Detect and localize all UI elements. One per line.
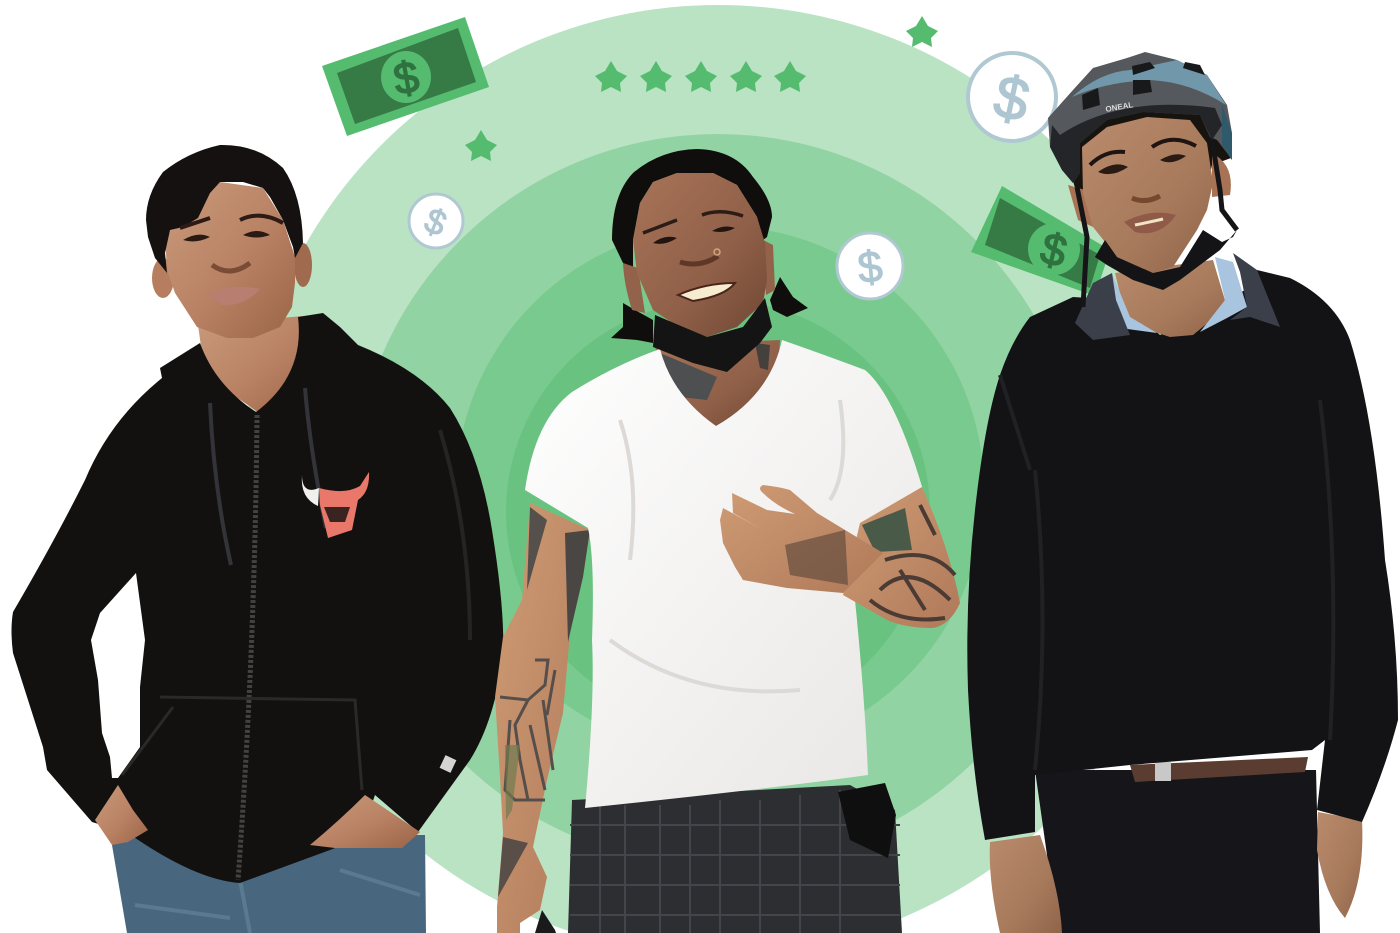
coin top right: [968, 53, 1056, 141]
t-shirt: [525, 340, 923, 808]
left hand: [990, 835, 1062, 933]
nose: [680, 256, 718, 264]
person: left man in black hoodie: [12, 145, 503, 933]
face mask under chin: [1095, 230, 1237, 290]
helmet blue side: [1222, 105, 1232, 160]
drawstrings: [210, 388, 326, 565]
arm tattoos: [498, 507, 590, 897]
coin left: $: [419, 201, 452, 244]
sweater: [967, 270, 1398, 840]
star left: [465, 130, 497, 161]
brows: [643, 212, 743, 233]
phone in hand: [535, 910, 556, 933]
coin centre right: $: [855, 242, 885, 293]
helmet lining and hair: [1058, 100, 1231, 195]
banknote top left: $: [390, 52, 423, 105]
ear right: [294, 243, 312, 287]
left hand: [95, 785, 148, 845]
shirt folds: [610, 400, 843, 691]
hair: [612, 149, 772, 267]
collar blue lining: [1105, 257, 1247, 333]
sleeve tag: [440, 755, 456, 773]
coin top right: $: [988, 62, 1035, 135]
pocket pouch: [838, 783, 896, 858]
brows: [1090, 140, 1196, 165]
lips: [207, 287, 260, 305]
banknote right: $: [1036, 224, 1071, 277]
row of five stars: [595, 61, 806, 92]
ears: [623, 240, 775, 313]
concentric green circles: [243, 5, 1193, 933]
helmet shell: [1048, 52, 1232, 183]
left arm: [495, 503, 590, 933]
ear left: [152, 258, 174, 298]
face: [165, 182, 295, 338]
trouser plaid: [570, 790, 900, 933]
trousers: [1035, 770, 1320, 933]
right forearm: [843, 487, 960, 628]
face: [1082, 117, 1213, 273]
chin strap: [1077, 140, 1237, 307]
jeans: [112, 835, 426, 933]
coin left: [409, 194, 463, 248]
neck: [655, 340, 780, 426]
face: [633, 173, 767, 337]
coin centre right: [837, 233, 903, 299]
bull logo: [302, 472, 369, 538]
star top right: [906, 16, 938, 47]
brows: [180, 216, 283, 228]
sleeve fold: [440, 430, 470, 640]
banknote right: [971, 186, 1110, 296]
hoodie pocket: [122, 697, 362, 790]
hoodie zipper: [238, 415, 257, 880]
helmet: [1048, 52, 1232, 183]
nose: [212, 263, 250, 271]
neck tattoo small: [755, 343, 770, 370]
eyes: [653, 227, 735, 244]
right hand: [310, 795, 420, 848]
hoodie: [12, 313, 503, 883]
neck tattoo: [660, 353, 717, 400]
helmet blue band: [1072, 60, 1226, 105]
ears: [1068, 153, 1231, 227]
teeth: [1135, 219, 1163, 225]
white gap between arm and torso: [91, 573, 145, 778]
face mask: [653, 298, 772, 372]
trousers: [568, 785, 902, 933]
smile: [678, 283, 735, 301]
right hand: [1317, 812, 1362, 918]
helmet brand label: ONEAL: [1105, 100, 1134, 114]
hand tattoo: [785, 530, 848, 585]
person: right man in black sweater with helmet: [967, 52, 1398, 933]
hair: [146, 145, 303, 273]
plaid collar: [1075, 253, 1280, 340]
lips: [1124, 213, 1176, 233]
hand: [720, 485, 883, 593]
nose: [1132, 196, 1160, 201]
hair tails: [611, 277, 808, 343]
nose ring: [714, 249, 720, 255]
sweater folds: [1000, 375, 1333, 770]
forearm tattoos: [870, 505, 955, 620]
eyes: [1098, 154, 1186, 174]
belt buckle: [1155, 762, 1171, 781]
person: centre man in white t-shirt: [495, 149, 960, 933]
neck: [1115, 260, 1227, 337]
helmet dark visor: [1050, 105, 1222, 183]
eyes: [183, 231, 270, 241]
belt: [1130, 757, 1308, 782]
helmet vents: [1082, 62, 1205, 110]
neck: [198, 315, 316, 415]
upper arm tattoo: [862, 508, 912, 552]
banknote top left: [322, 17, 489, 136]
